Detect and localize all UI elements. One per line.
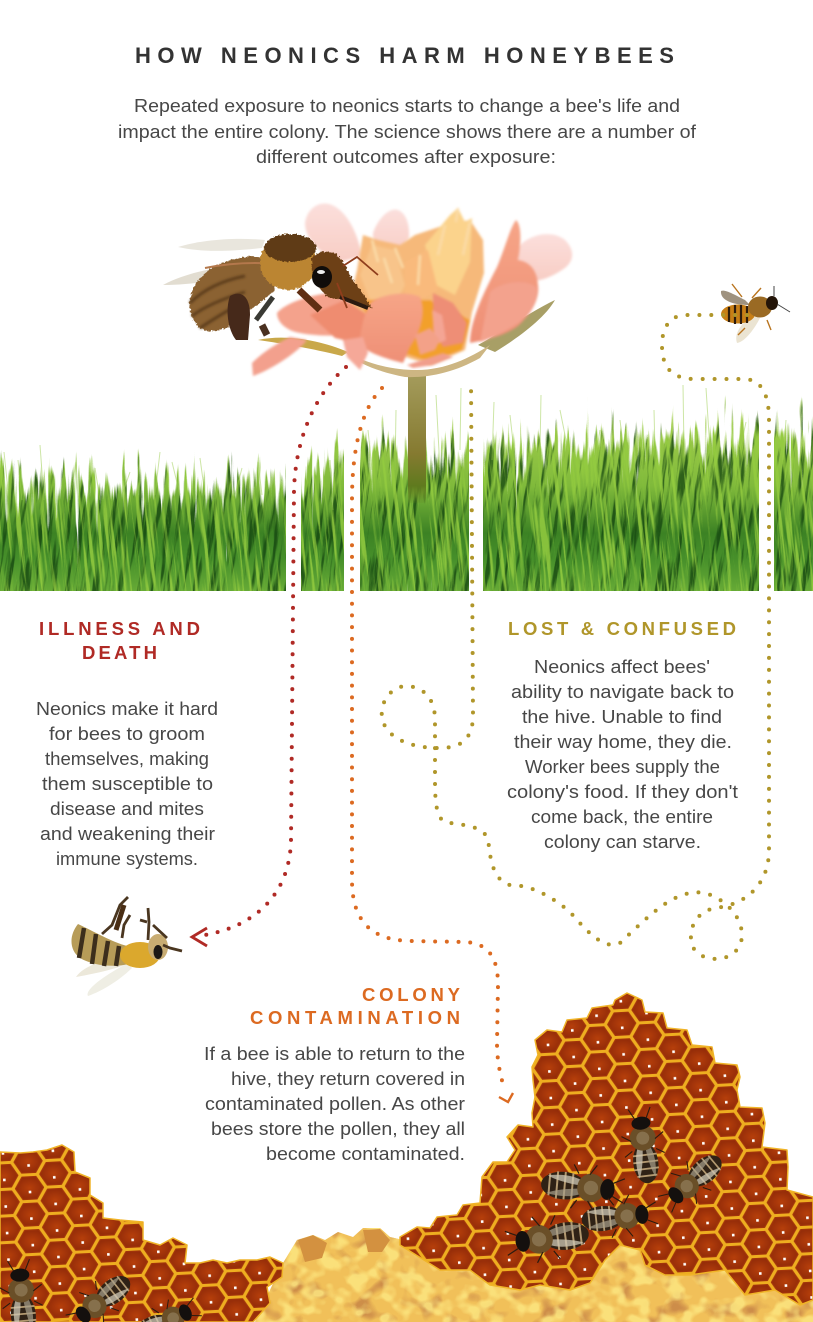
text: colony contamination: hive, they return covered in [231,1069,465,1089]
abdomen [190,257,275,331]
heading: illness and death [39,618,200,663]
sepals and base rim [258,338,348,356]
flying bee [721,284,790,343]
antenna [337,257,378,308]
comb bees [0,1258,206,1322]
intro paragraph [118,96,697,167]
back pale petals [305,204,572,281]
orange dotted path with arrow [352,388,513,1102]
red dotted path with arrow [192,367,346,946]
grass field [0,380,813,591]
wings [178,239,265,251]
text: colony contamination: If a bee is able to return to the [204,1044,465,1064]
title: HOW NEONICS HARM HONEYBEES [135,43,674,68]
flower stem [408,376,426,503]
text: colony contamination: become contaminated. [266,1144,465,1164]
panel: illness and death [36,618,218,869]
text: colony contamination: bees store the pollen, they all [211,1119,465,1139]
text: illness and death: for bees to groom [49,724,205,744]
text: illness and death: them susceptible to [42,774,213,794]
text: colony contamination: contaminated pollen. As other [205,1094,465,1114]
text: illness and death: themselves, making [45,749,209,769]
honeycomb left [0,1145,283,1322]
text: illness and death: Neonics make it hard [36,699,218,719]
heading: illness and death: DEATH [82,642,157,663]
honeycomb right [400,993,813,1305]
olive dotted path [382,315,769,959]
heading: colony contamination [250,984,461,1028]
upside-down dead bee [71,897,182,996]
legs [228,294,250,340]
text: illness and death: immune systems. [56,849,198,869]
panel: colony contamination [204,984,465,1164]
heading: illness and death: ILLNESS AND [39,618,200,639]
flower heart and stamens [345,208,484,365]
pale capped comb at bottom [250,1225,813,1322]
bee on flower [163,234,378,340]
coral petals [252,220,538,376]
text: lost and confused: the hive. Unable to find [522,707,722,727]
text: illness and death: disease and mites [50,799,204,819]
intro paragraph: Repeated exposure to neonics starts to change a bee's life and [134,96,680,116]
text: lost and confused: colony can starve. [544,832,701,852]
comb bees [504,1106,733,1266]
text: illness and death: and weakening their [40,824,215,844]
text: lost and confused: their way home, they die. [514,732,732,752]
text: lost and confused [507,657,738,852]
flower [252,204,572,377]
text: lost and confused: Worker bees supply the [525,757,720,777]
white gaps in grass behind the dotted paths [286,385,774,591]
heading: lost and confused: LOST & CONFUSED [508,618,736,639]
heading: colony contamination: CONTAMINATION [250,1007,460,1028]
thorax and head [260,234,372,308]
panel: lost and confused [507,618,738,852]
intro paragraph: different outcomes after exposure: [256,147,556,167]
intro paragraph: impact the entire colony. The science shows there are a number of [118,122,697,142]
text: lost and confused: colony's food. If they don't [507,782,738,802]
text: lost and confused: Neonics affect bees' [534,657,710,677]
text: illness and death [36,699,218,869]
heading: colony contamination: COLONY [362,984,461,1005]
text: colony contamination [204,1044,465,1164]
text: lost and confused: ability to navigate back to [511,682,734,702]
text: lost and confused: come back, the entire [531,807,713,827]
